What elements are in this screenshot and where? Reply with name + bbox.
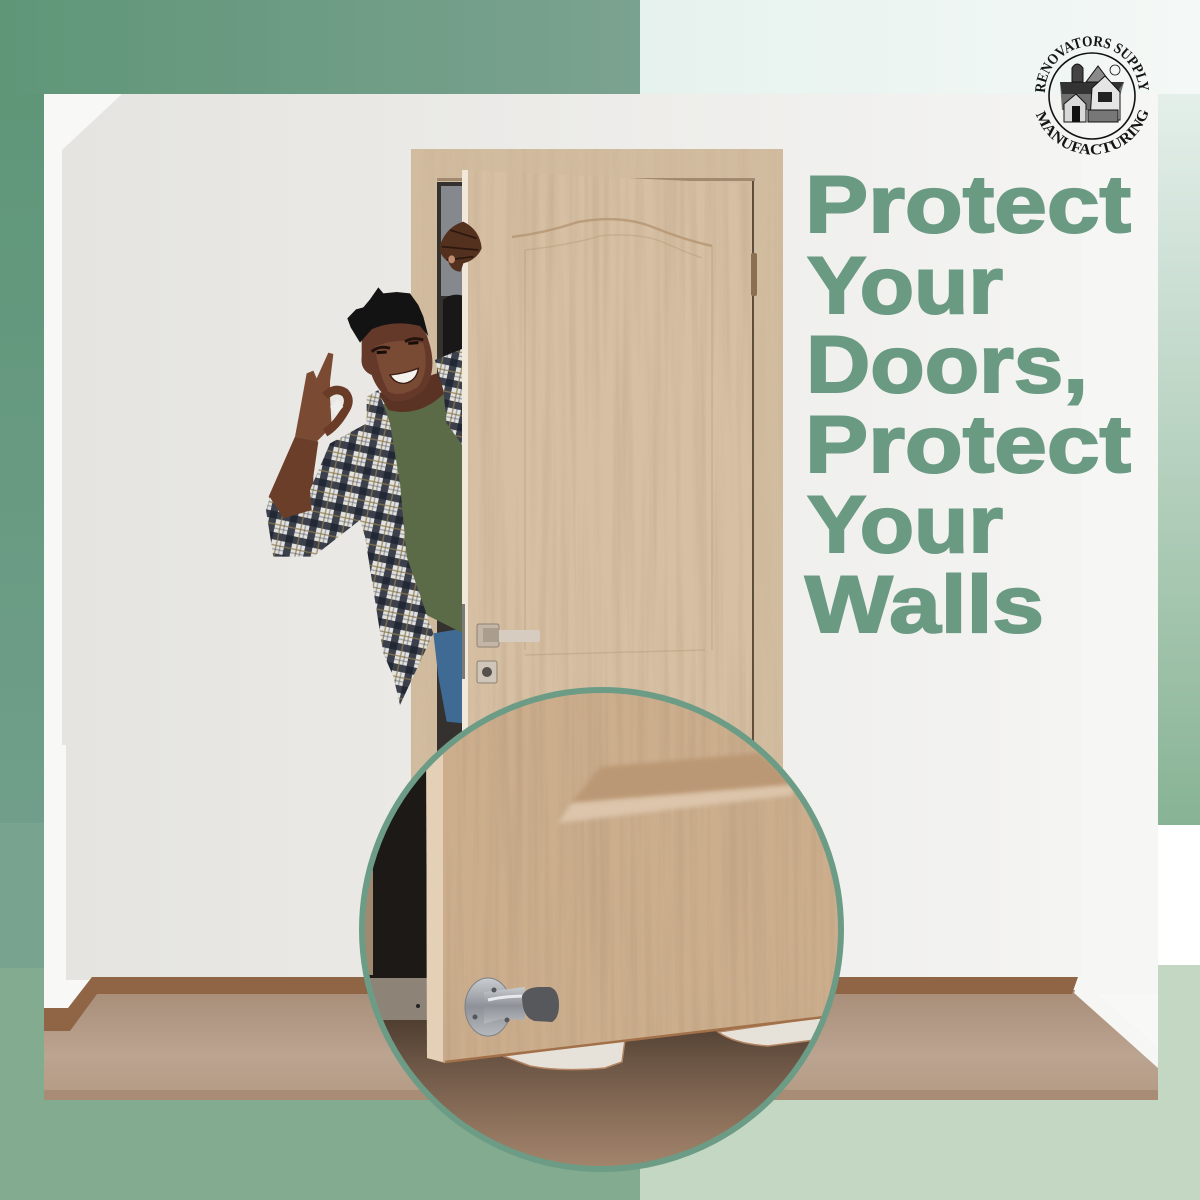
logo ring text: RENOVATORS SUPPLY (1035, 36, 1149, 93)
inset floor (383, 1020, 810, 1166)
heading: Doors, (806, 320, 1088, 410)
dark opening behind door (437, 182, 462, 752)
door leaf (462, 170, 757, 732)
jeans (433, 628, 463, 723)
logo house drawing (1060, 64, 1124, 122)
OK hand gesture (295, 353, 348, 442)
heading: Protect (805, 400, 1131, 490)
door frame (411, 149, 783, 780)
inset door panel moulding (570, 753, 793, 805)
heading (805, 160, 1131, 650)
hair (347, 287, 428, 343)
hinge (751, 253, 757, 296)
heading: Walls (805, 560, 1044, 650)
heading: Your (807, 480, 1003, 570)
door handle and lock (462, 604, 540, 683)
photo: room with door (44, 94, 1158, 1100)
door upper panel moulding (512, 219, 712, 246)
man peeking from behind door (266, 287, 463, 723)
inset base: wall (350, 680, 850, 1180)
hand gripping door edge (440, 222, 482, 272)
heading: Protect (805, 160, 1131, 250)
circle outline (362, 690, 841, 1169)
inset dark doorway (365, 770, 427, 1020)
inset shoes (503, 1016, 830, 1070)
logo lower ring text: MANUFACTURING (1036, 110, 1148, 155)
face highlights (375, 341, 426, 394)
rubber-tipped door stop (465, 978, 559, 1036)
green t-shirt (380, 392, 463, 633)
plaid flannel shirt (266, 348, 463, 705)
zoomed-in circle inset (350, 680, 850, 1180)
head (361, 317, 432, 401)
door panel faint lines (525, 235, 712, 655)
logo: Renovators Supply Manufacturing (1035, 36, 1149, 155)
room wall (62, 94, 1158, 994)
forearm (269, 437, 318, 520)
floor and skirting boards (44, 977, 1158, 1100)
neck (378, 373, 446, 412)
inset door surface (426, 680, 850, 1070)
smile (390, 368, 418, 383)
eyes and brows (372, 339, 423, 352)
heading: Your (807, 241, 1003, 331)
